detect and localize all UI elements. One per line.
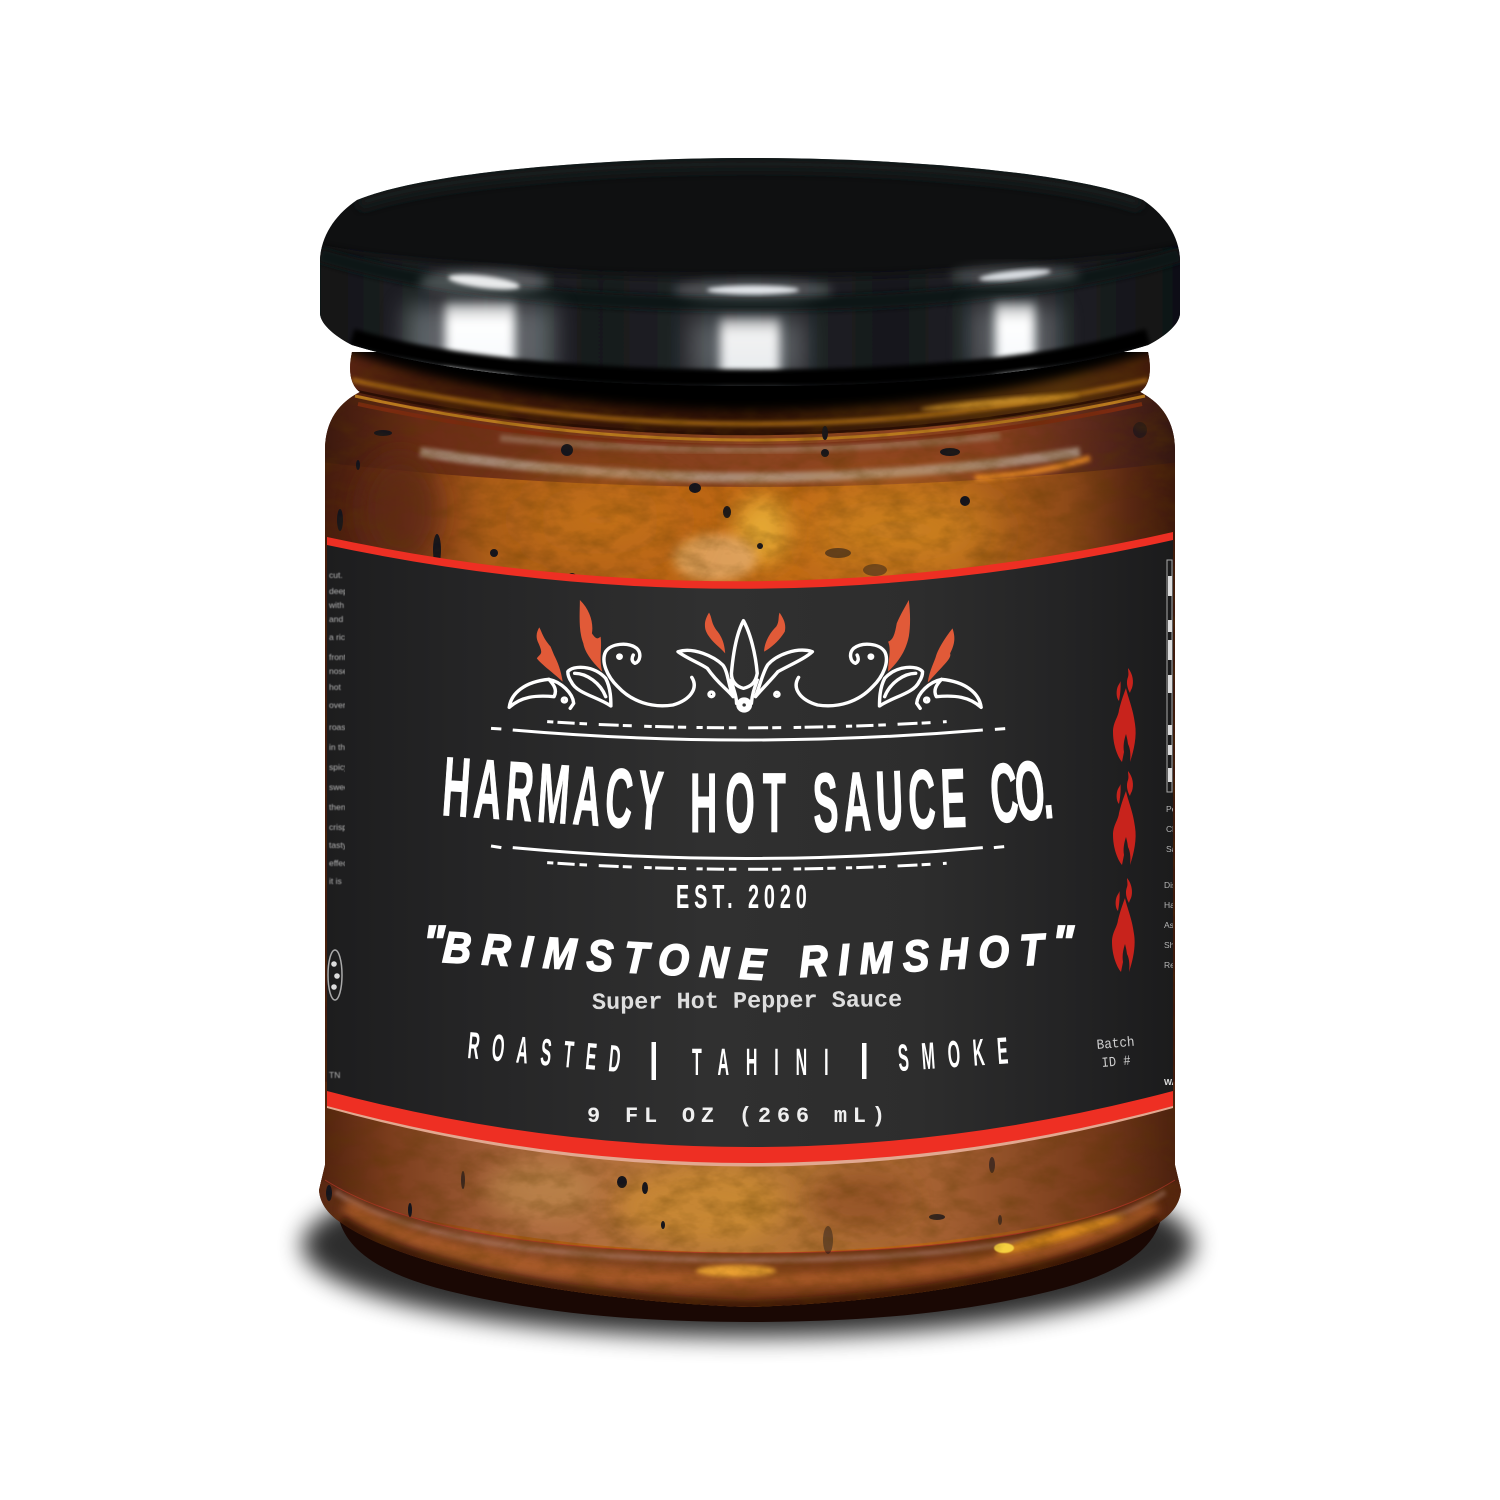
- label: [327, 532, 1190, 1166]
- left side description text: effect: [329, 858, 350, 868]
- flavor name: ": [1052, 916, 1075, 968]
- heat level flames: [1112, 668, 1136, 972]
- left side description text: tasty: [329, 840, 348, 850]
- flavor name: RIMSHOT: [798, 924, 1048, 986]
- sauce flecks: [326, 422, 1147, 1254]
- batch id: [1096, 1035, 1135, 1072]
- flavor name: ": [423, 916, 446, 968]
- base highlights: [696, 1265, 776, 1277]
- ground shadow: [302, 1153, 1194, 1337]
- batch id: ID #: [1101, 1054, 1131, 1072]
- label black panel: [327, 540, 1173, 1147]
- lid rim highlights: [405, 305, 555, 375]
- flame 2: [1113, 771, 1136, 865]
- right side nutrition facts: Harm: [1164, 900, 1185, 910]
- right side nutrition facts: [1164, 560, 1173, 1085]
- lid groove: [320, 255, 1180, 304]
- sauce grain: [310, 340, 1190, 1320]
- net volume: 9 FL OZ (266 mL): [587, 1104, 885, 1129]
- dark glass base: [338, 1215, 1162, 1322]
- left side description text: front: [329, 652, 347, 662]
- lid: [310, 158, 1190, 400]
- shadow under lid: [351, 352, 1149, 415]
- ornament white scrollwork: [509, 621, 981, 708]
- right side nutrition facts: WANT: [1164, 1077, 1190, 1087]
- shoulder band: [320, 385, 1180, 487]
- flavor notes: ROASTED: [466, 1026, 622, 1081]
- left side description text: in the: [329, 742, 350, 752]
- flavor notes: [466, 1026, 1009, 1084]
- left side description text: spicy: [329, 762, 349, 772]
- left side description text: sweet: [329, 782, 352, 792]
- jar product image: [302, 158, 1194, 1337]
- brand title: [440, 739, 1056, 850]
- left side description text: with: [328, 600, 344, 610]
- right side nutrition facts: Shak: [1164, 940, 1184, 950]
- subtitle: Super Hot Pepper Sauce: [592, 987, 902, 1017]
- lid upper highlights: [448, 272, 520, 292]
- left side description text: then: [329, 802, 346, 812]
- lid bottom shadow: [352, 337, 1148, 378]
- right side nutrition facts: Pepp: [1166, 804, 1186, 814]
- left side description text: roasted: [329, 722, 358, 732]
- flavor name: [423, 916, 1075, 990]
- shoulder stripes: [500, 436, 1000, 450]
- left side description text: crispy: [329, 822, 352, 832]
- established year: EST. 2020: [676, 878, 807, 915]
- bottom rule with dashes: [491, 846, 1004, 869]
- ornament: [491, 600, 1005, 869]
- left side description text: over the: [329, 700, 360, 710]
- lid top edge sheen: [358, 164, 1142, 204]
- right side nutrition facts: Salt: [1166, 844, 1181, 854]
- brand title: SAUCE: [811, 751, 968, 850]
- left side description text: deep: [329, 586, 348, 596]
- brand title: CO.: [986, 742, 1056, 841]
- top rule with dashes: [491, 722, 1005, 740]
- left side description text: it is: [329, 876, 342, 886]
- icon: tennessee tri-star: [328, 950, 342, 1000]
- sauce body: [310, 330, 1190, 1320]
- batch id: Batch: [1096, 1035, 1135, 1054]
- flame 1: [1113, 668, 1136, 762]
- flavor notes: TAHINI: [692, 1042, 829, 1084]
- left side description text: a rich: [329, 632, 350, 642]
- left side description text: cut.: [329, 570, 343, 580]
- brand title: HARMACY: [440, 739, 666, 848]
- left side description text: nose,: [329, 666, 350, 676]
- left side description text: and: [329, 614, 343, 624]
- base bead: [319, 1180, 1181, 1307]
- brand title: HOT: [690, 756, 786, 850]
- right side nutrition facts: Distr: [1164, 880, 1182, 890]
- right side nutrition facts: Chil: [1166, 824, 1181, 834]
- left side description text: TN: [329, 1070, 340, 1080]
- flavor notes: SMOKE: [897, 1031, 1009, 1080]
- flame 3: [1112, 878, 1135, 972]
- flavor name: BRIMSTONE: [441, 922, 768, 990]
- glowing patches: [800, 490, 1000, 570]
- left side description text: [328, 572, 345, 1078]
- right side nutrition facts: Refr: [1164, 960, 1180, 970]
- neck threads: [350, 352, 1150, 435]
- left side description text: hot: [329, 682, 341, 692]
- lower sauce band: [320, 1080, 1180, 1252]
- ornament red flames: [537, 600, 954, 683]
- lid side band: [320, 244, 1180, 386]
- right side nutrition facts: Ash: [1164, 920, 1179, 930]
